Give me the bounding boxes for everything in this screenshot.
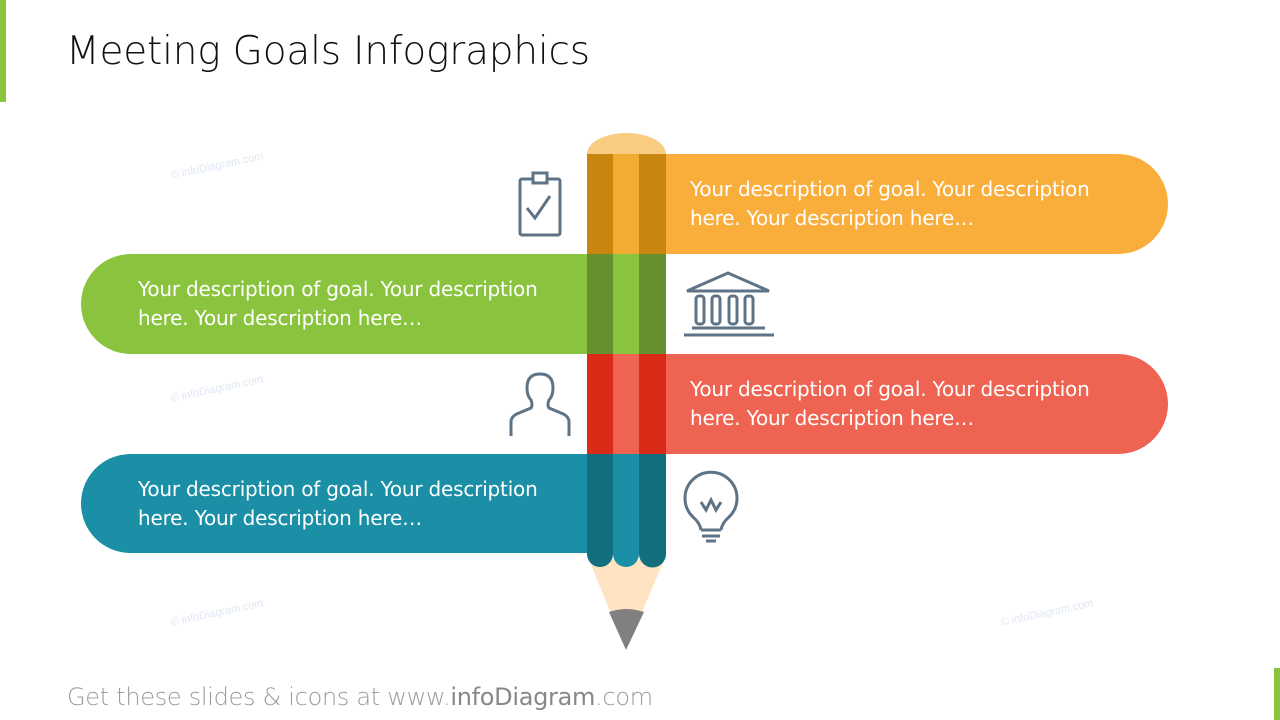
band: teal xyxy=(81,454,666,553)
text: © infoDiagram.com xyxy=(1000,597,1095,629)
text: © infoDiagram.com xyxy=(170,373,265,405)
text: © infoDiagram.com xyxy=(170,150,265,182)
icon: clipboard xyxy=(518,172,562,236)
title: Meeting Goals Infographics xyxy=(66,29,590,74)
text: green: Your description of goal. Your description xyxy=(138,277,538,301)
accent bar xyxy=(0,0,6,102)
text: teal: here. Your description here… xyxy=(138,506,422,530)
band: orange xyxy=(587,154,1168,254)
text: orange: Your description of goal. Your description xyxy=(690,177,1090,201)
text: red: here. Your description here… xyxy=(690,406,974,430)
footer: Get these slides & icons at www.infoDiagram.com xyxy=(67,683,653,711)
text: red xyxy=(690,377,1090,430)
band: green xyxy=(81,254,666,354)
band: red xyxy=(587,354,1168,454)
text: green xyxy=(138,277,538,330)
icon: bank xyxy=(684,271,774,336)
text: orange xyxy=(690,177,1090,230)
text: green: here. Your description here… xyxy=(138,306,422,330)
text: teal: Your description of goal. Your description xyxy=(138,477,538,501)
text: © infoDiagram.com xyxy=(170,597,265,629)
icon: lightbulb xyxy=(684,470,738,542)
icon: person xyxy=(510,372,570,436)
text: red: Your description of goal. Your description xyxy=(690,377,1090,401)
text: teal xyxy=(138,477,538,530)
text: orange: here. Your description here… xyxy=(690,206,974,230)
accent: bottom right xyxy=(1274,668,1280,720)
